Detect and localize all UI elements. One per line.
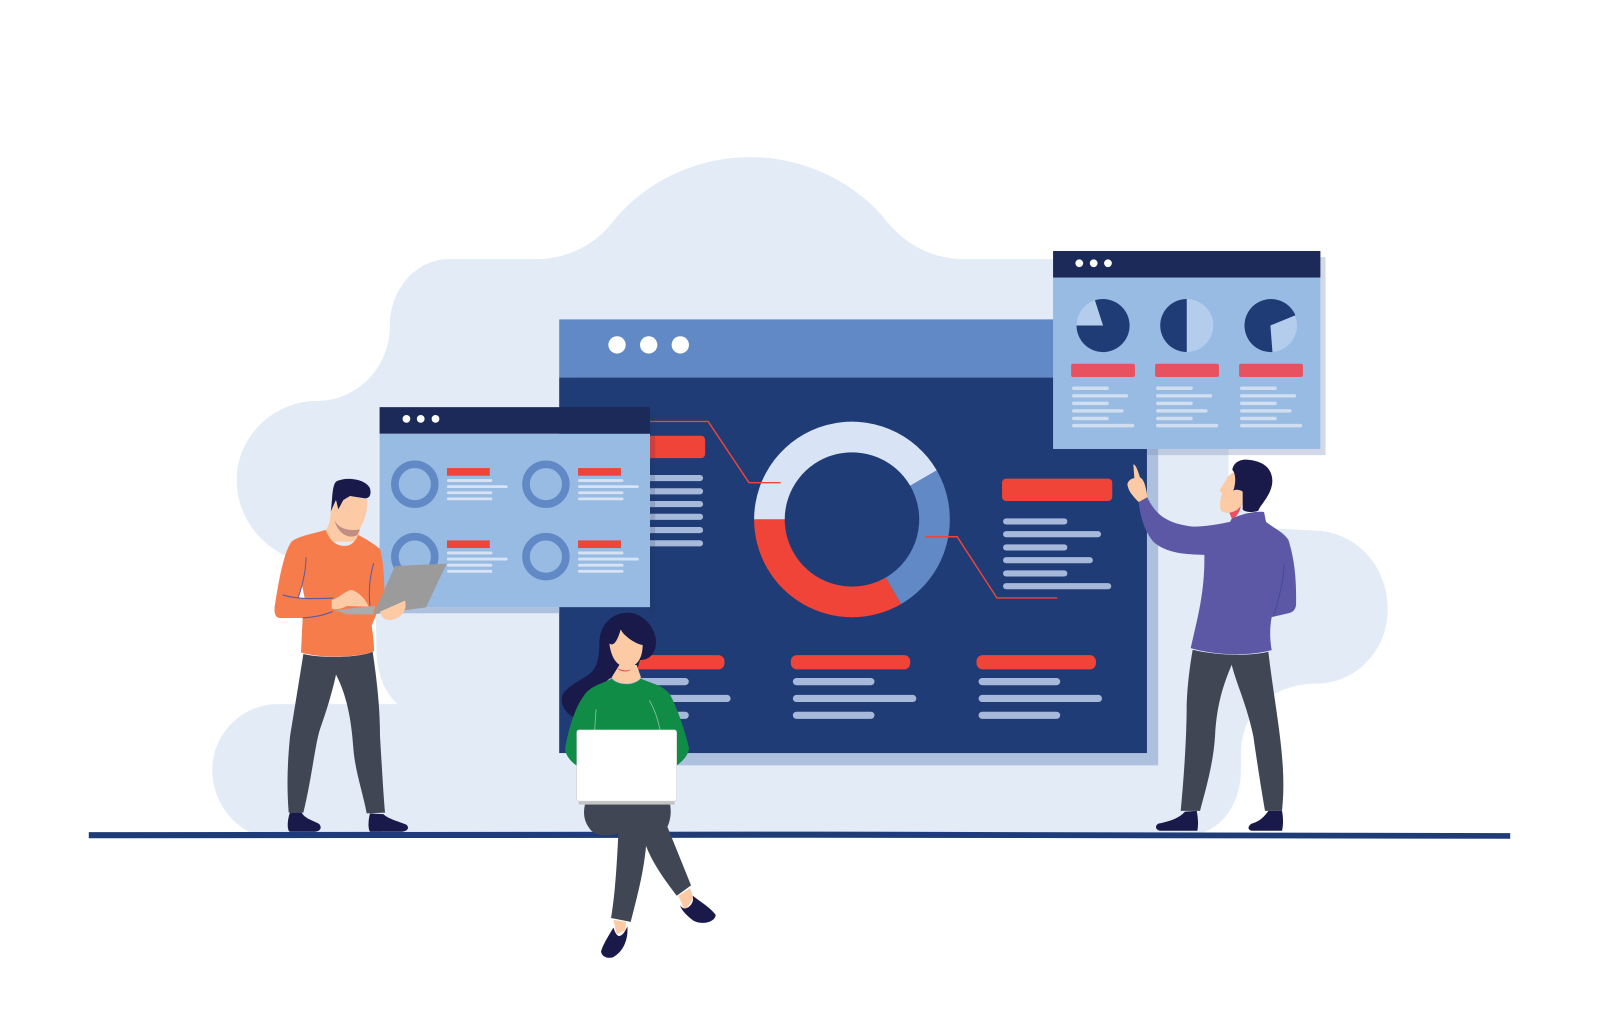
body of man in orange (274, 530, 408, 832)
body of man in purple (1127, 464, 1296, 831)
pie chart 1 (1077, 299, 1130, 352)
ankles (613, 888, 693, 934)
top-right window body (1053, 278, 1320, 449)
panel: main dashboard window (559, 319, 1158, 765)
trousers (288, 652, 385, 813)
sweater fold lines (283, 557, 374, 618)
top-right window shadow (1147, 257, 1326, 455)
white laptop lid (577, 730, 677, 801)
pie chart 3 (1244, 299, 1297, 352)
body of woman (565, 679, 716, 958)
pie labels (1071, 364, 1303, 377)
trousers (584, 804, 691, 922)
top-right window control dots (1075, 259, 1112, 267)
white gap under arm (299, 583, 305, 598)
hair (562, 613, 656, 718)
panel: top-right window with pie charts (1053, 251, 1326, 455)
collar (1229, 506, 1241, 520)
right text block (1002, 479, 1112, 589)
callout connector left (643, 421, 781, 483)
main window shadow (577, 337, 1158, 765)
laptop screen (373, 564, 447, 614)
white laptop base (579, 800, 675, 805)
typing hand (332, 590, 368, 609)
green sweater (565, 679, 689, 765)
bottom text column 3 (977, 655, 1102, 719)
pie text lines (1072, 387, 1302, 427)
hair (331, 479, 371, 512)
panel: left window with ring charts (380, 407, 655, 613)
ground line (89, 832, 1510, 839)
red labels (447, 468, 621, 548)
head of man in purple (1219, 460, 1272, 520)
ring charts (395, 464, 566, 577)
left window control dots (403, 415, 439, 423)
main window header (559, 319, 1147, 378)
shoes (601, 896, 716, 958)
shoes (288, 813, 408, 832)
bottom text column 1 (605, 655, 731, 719)
left window header (380, 407, 650, 434)
head of woman (562, 613, 656, 718)
laptop base (335, 606, 375, 614)
holding hand (380, 601, 406, 620)
main window control dots (608, 336, 689, 354)
figure: man in orange with laptop (274, 479, 447, 832)
trousers (1181, 650, 1283, 811)
neck shadow (334, 520, 360, 537)
shoes (1156, 811, 1283, 831)
face (609, 629, 643, 667)
pie chart 2 (1160, 299, 1213, 352)
figure: man in purple pointing (1127, 460, 1296, 831)
text lines (447, 479, 639, 573)
purple sweater (1139, 497, 1296, 654)
left window shadow (386, 607, 559, 613)
head of man in orange (326, 479, 371, 542)
top-right window header (1053, 251, 1320, 278)
main window body (559, 378, 1147, 753)
background cloud blob (212, 157, 1388, 835)
callout connector right (926, 537, 1057, 598)
neck (612, 665, 641, 683)
laptop and hands (332, 564, 447, 620)
figure: woman in green with laptop (562, 613, 716, 958)
hair (1232, 460, 1272, 512)
sweater fold line (1273, 564, 1284, 616)
left window shadow on main panel (650, 413, 655, 613)
left text block (612, 436, 705, 546)
donut chart (754, 422, 950, 617)
necklace (617, 668, 632, 671)
pointing hand (1127, 464, 1147, 502)
sweater fold lines (595, 700, 660, 730)
orange sweater (274, 530, 384, 657)
face and neck (326, 496, 367, 542)
face (1219, 472, 1243, 513)
left window body (380, 434, 650, 607)
bottom text column 2 (791, 655, 916, 719)
